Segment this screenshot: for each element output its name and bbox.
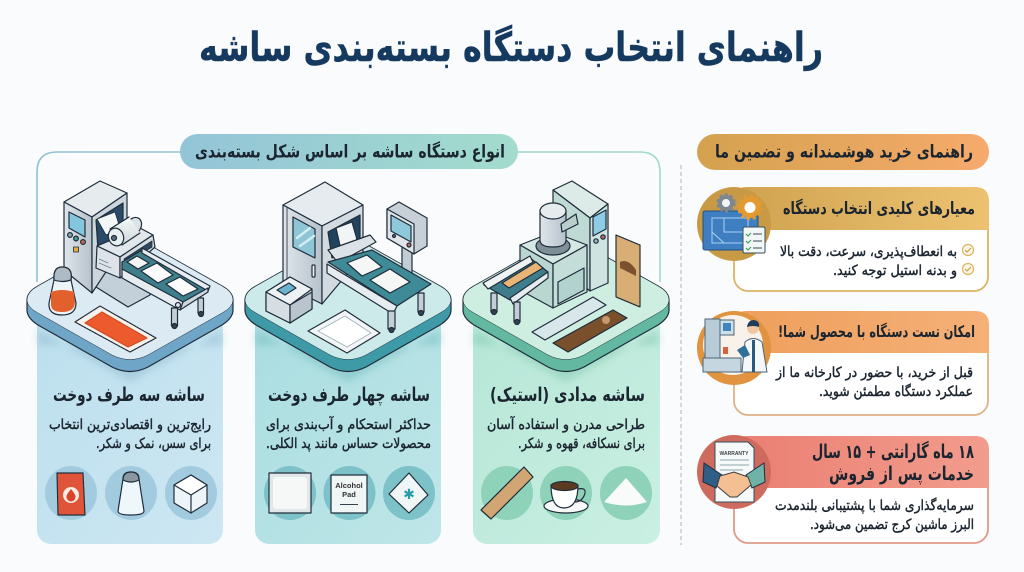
panel: warranty and after-sales: ۱۸ ماه گارانتی + ۱۵ سال <box>812 440 974 463</box>
icon: alcohol pad: Alcohol <box>335 481 363 490</box>
description <box>49 417 211 452</box>
section frame: packaging types <box>37 152 660 282</box>
panel: stick sachet <box>463 181 669 544</box>
panel: warranty and after-sales <box>697 435 989 543</box>
icon: white sachet on platform <box>308 310 380 353</box>
panel text <box>775 365 973 400</box>
panel heading <box>733 187 989 230</box>
heading: ساشه مدادی (استیک) <box>490 384 645 406</box>
panel text: عملکرد دستگاه مطمئن شوید. <box>819 383 973 400</box>
section heading: types by shape <box>180 134 518 169</box>
description <box>487 416 645 452</box>
icon: coffee cup <box>540 466 592 520</box>
platform: mint <box>463 238 669 382</box>
machine: stick sachet <box>483 181 608 324</box>
panel text: و بدنه استیل توجه کنید. <box>833 263 957 279</box>
icon: diamond pad: ✱ <box>403 487 415 503</box>
icon: stick pack <box>481 466 533 520</box>
panel: test the machine <box>697 311 989 415</box>
description: طراحی مدرن و استفاده آسان <box>487 416 645 433</box>
icon: red sachet <box>75 306 156 352</box>
check marks <box>962 244 974 274</box>
right heading: smart buying guide <box>697 134 989 170</box>
icon: foil sachet <box>264 466 316 520</box>
heading: ساشه چهار طرف دوخت <box>268 384 430 406</box>
icon: standing stick sachet <box>616 235 640 307</box>
platform: blue <box>27 238 233 382</box>
icon: warranty and handshake <box>697 435 771 509</box>
icon: sugar cube <box>165 466 217 520</box>
panel: warranty and after-sales: خدمات پس از فروش <box>829 463 974 485</box>
description: رایج‌ترین و اقتصادی‌ترین انتخاب <box>49 417 211 433</box>
description: حداکثر استحکام و آب‌بندی برای <box>266 416 431 433</box>
icon: sugar pile <box>600 466 652 520</box>
title: راهنمای انتخاب دستگاه بسته‌بندی ساشه <box>199 24 823 71</box>
panel: key selection criteria <box>697 187 989 291</box>
panel text: قبل از خرید، با حضور در کارخانه ما از <box>775 365 973 381</box>
icon: warranty and handshake: WARRANTY <box>720 451 749 457</box>
heading: ساشه سه طرف دوخت <box>53 384 205 406</box>
icon: diamond pad <box>383 466 435 520</box>
icon: blueprint and gears <box>697 187 771 261</box>
icon: silver stick <box>532 297 606 340</box>
panel: four-side seal sachet <box>245 182 451 544</box>
icon: sachet pack <box>45 466 97 520</box>
description: محصولات حساس مانند پد الکلی. <box>266 436 431 452</box>
section heading: types by shape: انواع دستگاه ساشه بر اساس شکل بسته‌بندی <box>195 140 505 162</box>
icon: salt shaker <box>105 466 157 520</box>
icon: alcohol pad <box>324 466 376 520</box>
machine: four-side seal <box>266 182 431 332</box>
panel text: سرمایه‌گذاری شما با پشتیبانی بلندمدت <box>775 497 974 514</box>
panel text: البرز ماشین کرج تضمین می‌شود. <box>810 517 974 533</box>
panel heading <box>733 436 989 488</box>
icon: brown stick <box>553 310 627 352</box>
panel heading <box>733 311 989 353</box>
description <box>266 416 431 452</box>
card body <box>37 300 223 544</box>
card body <box>473 300 660 544</box>
icon: sauce bottle <box>49 267 76 315</box>
description: برای سس، نمک و شکر. <box>96 436 211 452</box>
panel: three-side seal sachet <box>27 181 233 544</box>
panel text <box>780 244 957 279</box>
description: برای نسکافه، قهوه و شکر. <box>518 436 645 452</box>
panel text: به انعطاف‌پذیری، سرعت، دقت بالا <box>780 244 957 260</box>
machine: three-side seal <box>64 181 210 328</box>
icon: alcohol pad: Pad <box>342 490 356 499</box>
card body <box>255 300 441 544</box>
panel text <box>775 497 974 533</box>
icon: technician at machine <box>697 311 771 385</box>
divider <box>680 165 682 545</box>
platform: teal <box>245 238 451 382</box>
